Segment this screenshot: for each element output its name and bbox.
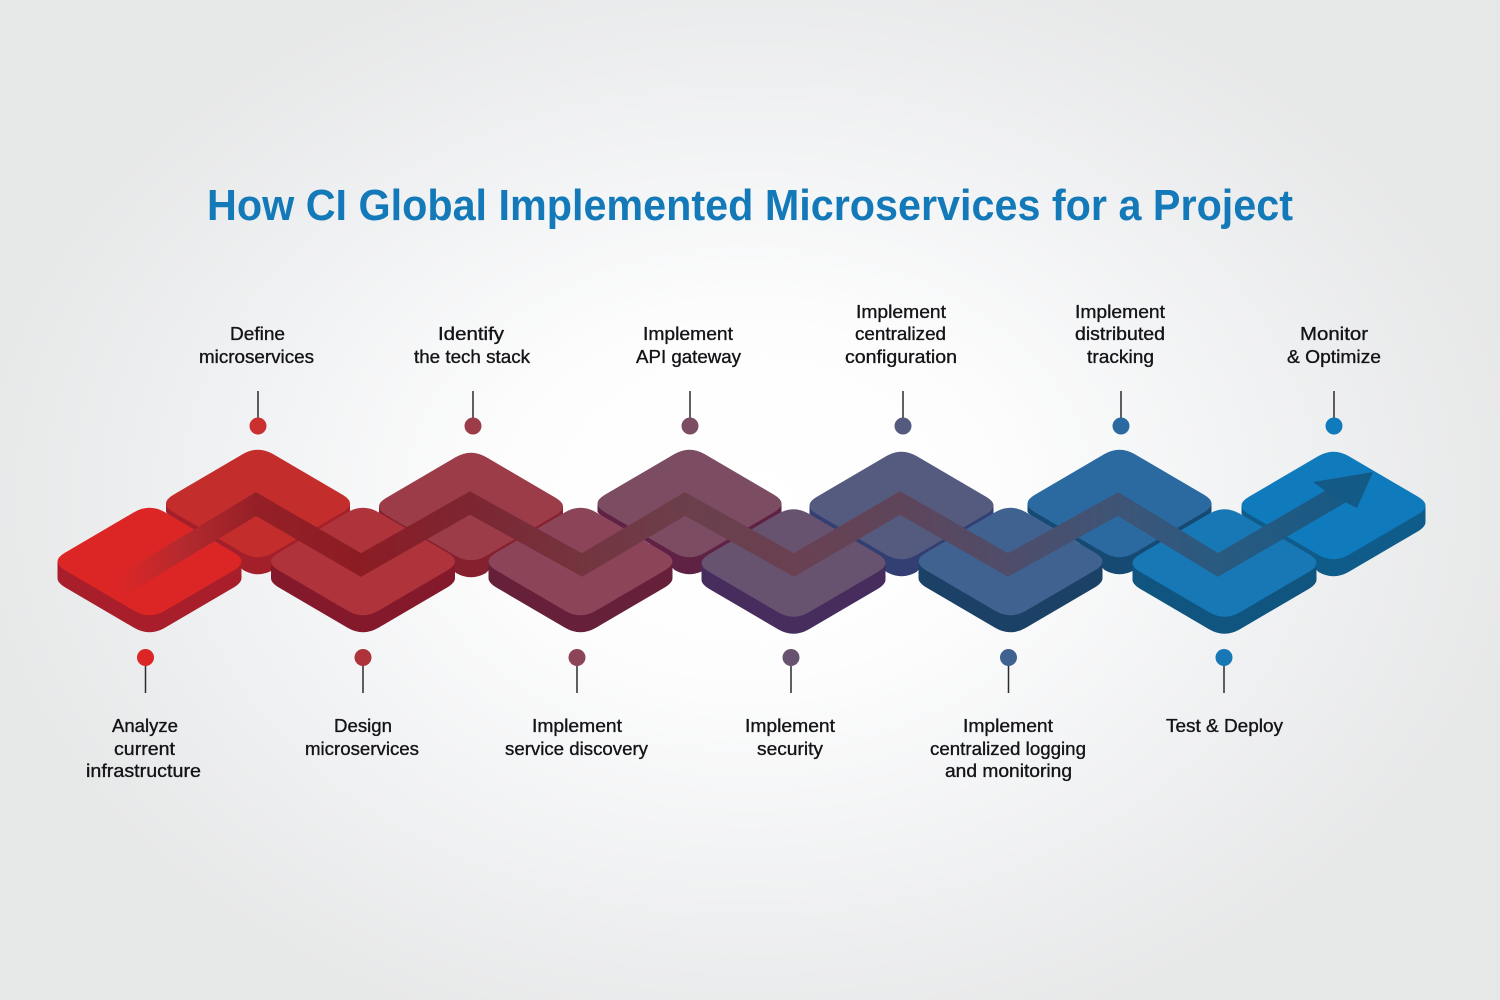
label: implement distributed tracking: Implement — [1075, 301, 1165, 322]
label: identify the tech stack: the tech stack — [414, 346, 531, 367]
marker: test and deploy — [1216, 649, 1232, 693]
label: implement service discovery — [505, 715, 649, 759]
marker: define microservices — [250, 391, 266, 434]
label: define microservices: microservices — [199, 346, 314, 367]
marker: implement centralized logging — [1000, 649, 1017, 693]
tile 10: implement distributed tracking — [1028, 450, 1212, 574]
marker: identify the tech stack — [464, 391, 482, 434]
tile 7: implement security — [702, 509, 886, 634]
marker: analyze current infrastructure — [137, 649, 154, 693]
marker: implement centralized configuration — [894, 391, 912, 434]
arrow: zigzag flow line — [122, 472, 1373, 585]
tile 4: identify the tech stack — [379, 453, 563, 577]
label: implement centralized logging and monitoring: Implement — [963, 715, 1053, 736]
label: implement service discovery: service discovery — [505, 738, 649, 759]
label: implement security: Implement — [745, 715, 835, 736]
label: implement centralized configuration: centralized — [855, 323, 946, 344]
label: implement centralized configuration — [845, 301, 957, 367]
tile 1: analyze current infrastructure — [58, 508, 242, 632]
label: implement centralized logging and monitoring: centralized logging — [930, 738, 1086, 759]
label: implement security: security — [757, 738, 824, 759]
label: design microservices — [305, 715, 419, 759]
label: design microservices: microservices — [305, 738, 419, 759]
tile 5: implement service discovery — [488, 508, 672, 632]
marker: monitor and optimize — [1326, 391, 1342, 434]
label: identify the tech stack: Identify — [438, 323, 505, 344]
label: design microservices: Design — [334, 715, 392, 736]
label: identify the tech stack — [414, 323, 531, 367]
label: analyze current infrastructure: infrastructure — [86, 760, 201, 781]
label: monitor and optimize — [1287, 323, 1381, 367]
label: implement security — [745, 715, 835, 759]
label: implement centralized logging and monitoring — [930, 715, 1086, 781]
label: implement distributed tracking: distributed — [1075, 323, 1165, 344]
label: implement centralized logging and monitoring: and monitoring — [945, 760, 1072, 781]
label: implement API gateway: API gateway — [636, 346, 742, 367]
marker: implement distributed tracking — [1112, 391, 1130, 434]
label: define microservices: Define — [230, 323, 285, 344]
label: implement centralized configuration: Implement — [856, 301, 946, 322]
title: How CI Global Implemented Microservices for a Project — [207, 181, 1293, 230]
label: define microservices — [199, 323, 314, 367]
label: implement distributed tracking — [1075, 301, 1165, 367]
label: implement distributed tracking: tracking — [1087, 346, 1154, 367]
marker: design microservices — [354, 649, 372, 693]
marker: implement API gateway — [682, 391, 698, 434]
tile 8: implement centralized configuration — [810, 452, 994, 576]
tile 3: design microservices — [271, 508, 455, 632]
tile 11: test and deploy — [1132, 509, 1316, 634]
label: analyze current infrastructure: Analyze — [112, 715, 178, 736]
label: monitor and optimize: Monitor — [1300, 323, 1368, 344]
tile 6: implement API gateway — [598, 450, 782, 574]
tile 12: monitor and optimize — [1242, 452, 1426, 576]
tile 2: define microservices — [166, 450, 350, 574]
label: analyze current infrastructure: current — [114, 738, 175, 759]
label: implement service discovery: Implement — [532, 715, 622, 736]
zigzag tile chain — [58, 450, 1426, 634]
tile 9: implement centralized logging and monitoring — [918, 508, 1102, 632]
label: implement API gateway: Implement — [643, 323, 733, 344]
label: test and deploy: Test & Deploy — [1166, 715, 1284, 736]
label: implement API gateway — [636, 323, 742, 367]
connectors and dots — [137, 391, 1342, 693]
label: monitor and optimize: & Optimize — [1287, 346, 1381, 367]
marker: implement security — [782, 649, 800, 693]
label: analyze current infrastructure — [86, 715, 201, 781]
label: implement centralized configuration: configuration — [845, 346, 957, 367]
marker: implement service discovery — [568, 649, 586, 693]
